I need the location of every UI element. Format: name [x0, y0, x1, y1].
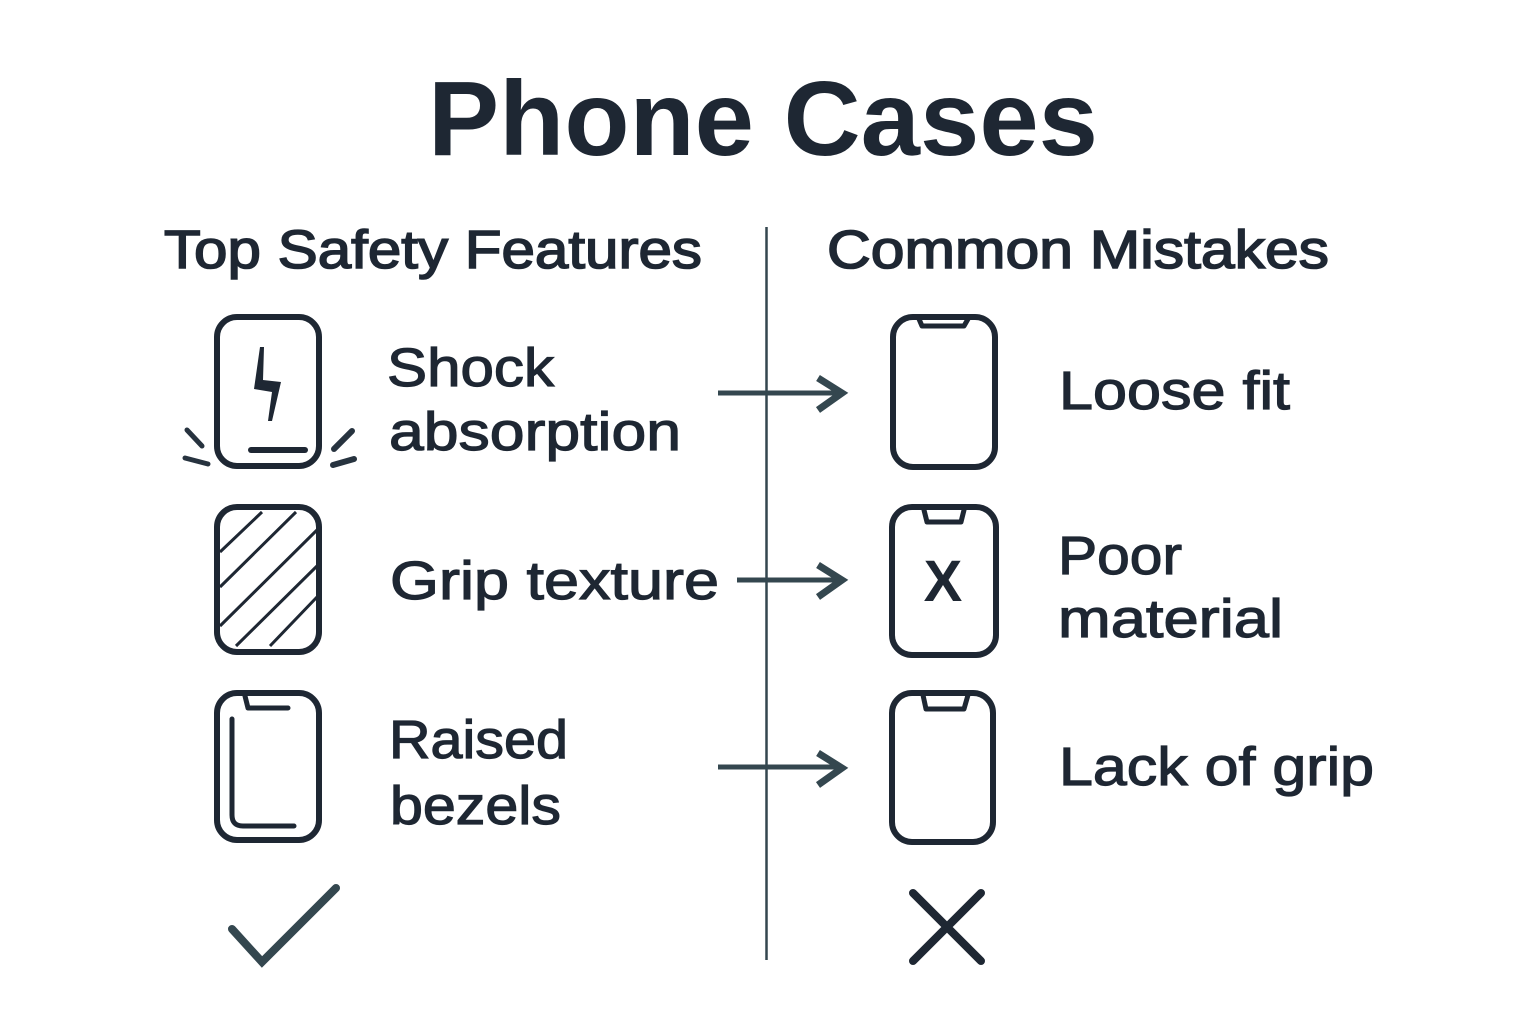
- label: loose fit: Loose fit: [1059, 361, 1290, 421]
- icon: check mark: [232, 888, 336, 962]
- label: lack of grip: Lack of grip: [1059, 737, 1374, 797]
- label: raised: Raised: [389, 710, 568, 770]
- arrow 2: [737, 565, 842, 597]
- label: material: material: [1058, 589, 1283, 649]
- icon: poor material: X: [924, 549, 963, 614]
- label: shock absorption: Shock: [387, 338, 555, 398]
- center divider: [765, 227, 768, 960]
- icon: lack of grip: [892, 693, 993, 842]
- icon: loose fit: [893, 317, 995, 467]
- icon: cross mark: [913, 893, 981, 961]
- icon: poor material: [892, 507, 996, 655]
- label: poor: Poor: [1058, 526, 1182, 586]
- heading: top safety features: Top Safety Features: [164, 220, 702, 280]
- arrow 3: [718, 753, 842, 785]
- title: Phone Cases: [428, 60, 1098, 178]
- heading: common mistakes: Common Mistakes: [827, 220, 1329, 280]
- icon: raised bezels: [217, 693, 319, 840]
- arrow 1: [718, 378, 842, 410]
- label: absorption: absorption: [389, 402, 681, 462]
- label: grip texture: Grip texture: [390, 551, 719, 611]
- icon: grip texture: [217, 507, 319, 652]
- label: bezels: bezels: [390, 776, 561, 836]
- icon: shock absorption: [185, 317, 354, 466]
